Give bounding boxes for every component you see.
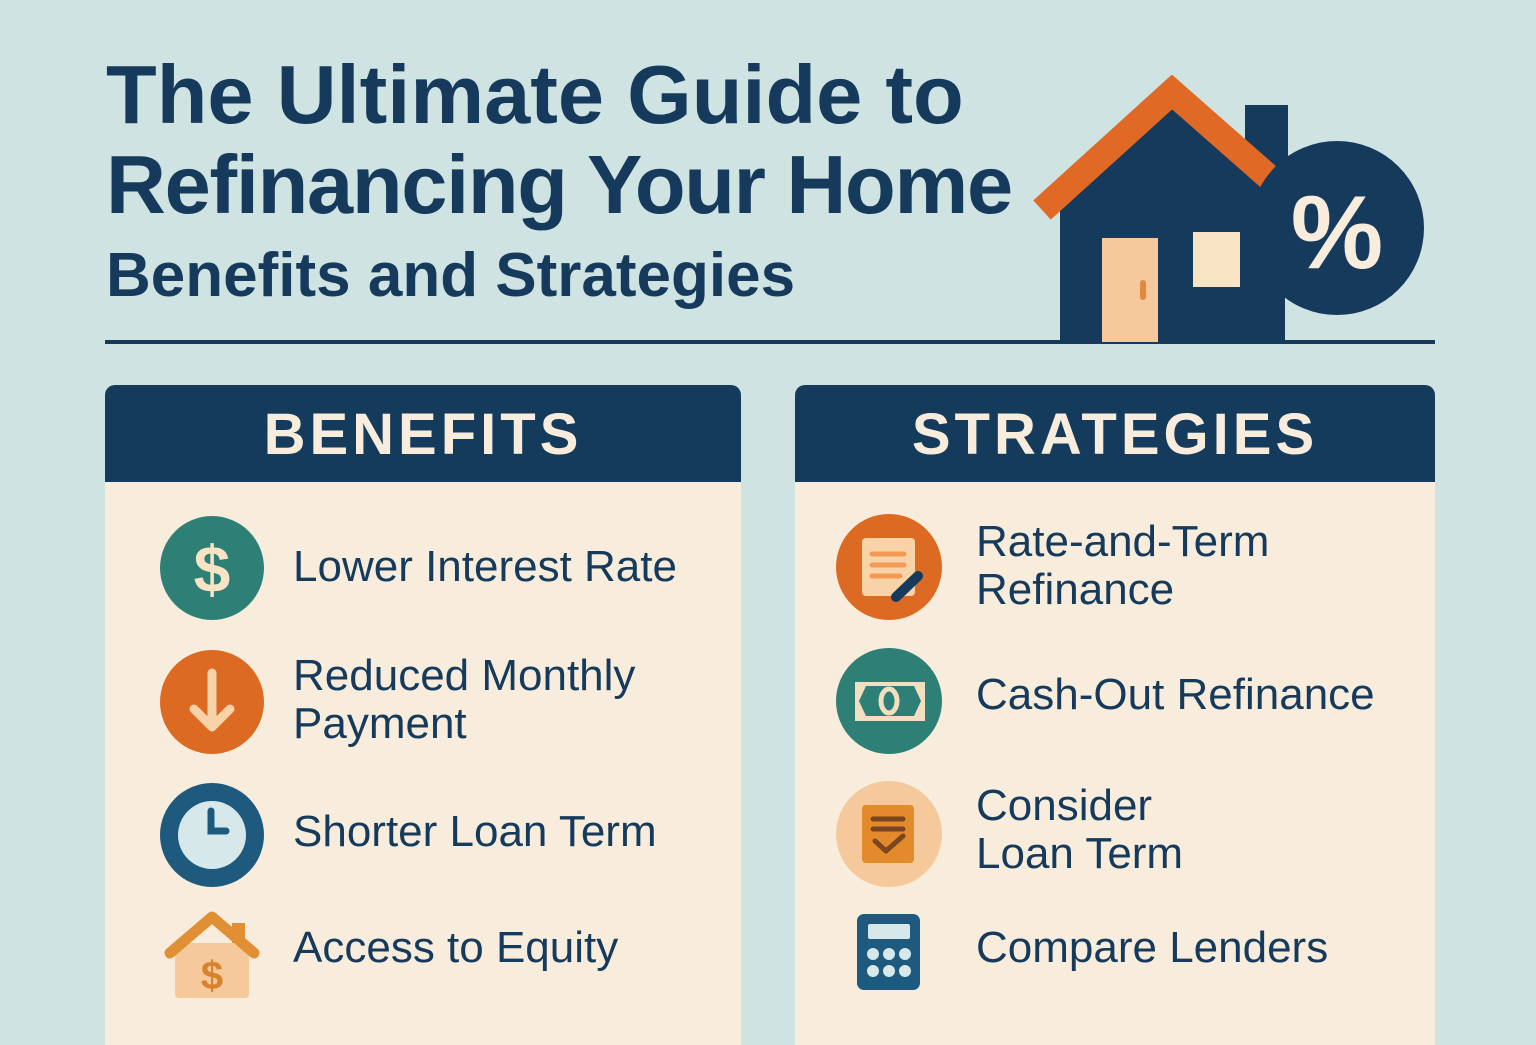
icon: house dollar (170, 917, 254, 998)
subtitle: Benefits and Strategies (106, 241, 795, 310)
icon: down arrow (160, 650, 264, 754)
item: reduced monthly payment (293, 651, 636, 748)
icon: dollar (160, 516, 264, 620)
benefit icons (160, 516, 264, 998)
icon: house with percent (1033, 75, 1424, 342)
item: reduced monthly payment: Payment (293, 699, 467, 748)
icon: checklist (836, 781, 942, 887)
item: consider loan term: Loan Term (976, 829, 1183, 878)
item: consider loan term: Consider (976, 781, 1152, 830)
item: reduced monthly payment: Reduced Monthly (293, 651, 635, 700)
benefits heading (105, 385, 741, 482)
item: compare lenders: Compare Lenders (976, 923, 1328, 972)
item: rate-and-term refinance: Rate-and-Term (976, 517, 1269, 566)
icon: house with percent: % (1291, 175, 1383, 291)
item: rate-and-term refinance (976, 517, 1269, 614)
panel: strategies (795, 385, 1435, 1045)
icon: cash bill (836, 648, 942, 754)
item: shorter loan term: Shorter Loan Term (293, 807, 657, 856)
strategies heading (795, 385, 1435, 482)
icon: house dollar: $ (201, 954, 223, 998)
divider rule (105, 340, 1435, 344)
icon: document pen (836, 514, 942, 620)
item: consider loan term (976, 781, 1183, 878)
strategy icons (836, 514, 942, 990)
title: The Ultimate Guide to (106, 48, 964, 141)
title (106, 48, 1012, 231)
item: access to equity: Access to Equity (293, 923, 618, 972)
strategies heading: STRATEGIES (912, 402, 1318, 467)
benefits heading: BENEFITS (264, 402, 582, 467)
icon: clock (160, 783, 264, 887)
item: cash-out refinance: Cash-Out Refinance (976, 670, 1375, 719)
icon: dollar: $ (194, 532, 230, 606)
icon: calculator (857, 914, 920, 990)
panel: benefits (105, 385, 741, 1045)
item: lower interest rate: Lower Interest Rate (293, 542, 677, 591)
title: Refinancing Your Home (106, 138, 1012, 231)
item: rate-and-term refinance: Refinance (976, 565, 1174, 614)
